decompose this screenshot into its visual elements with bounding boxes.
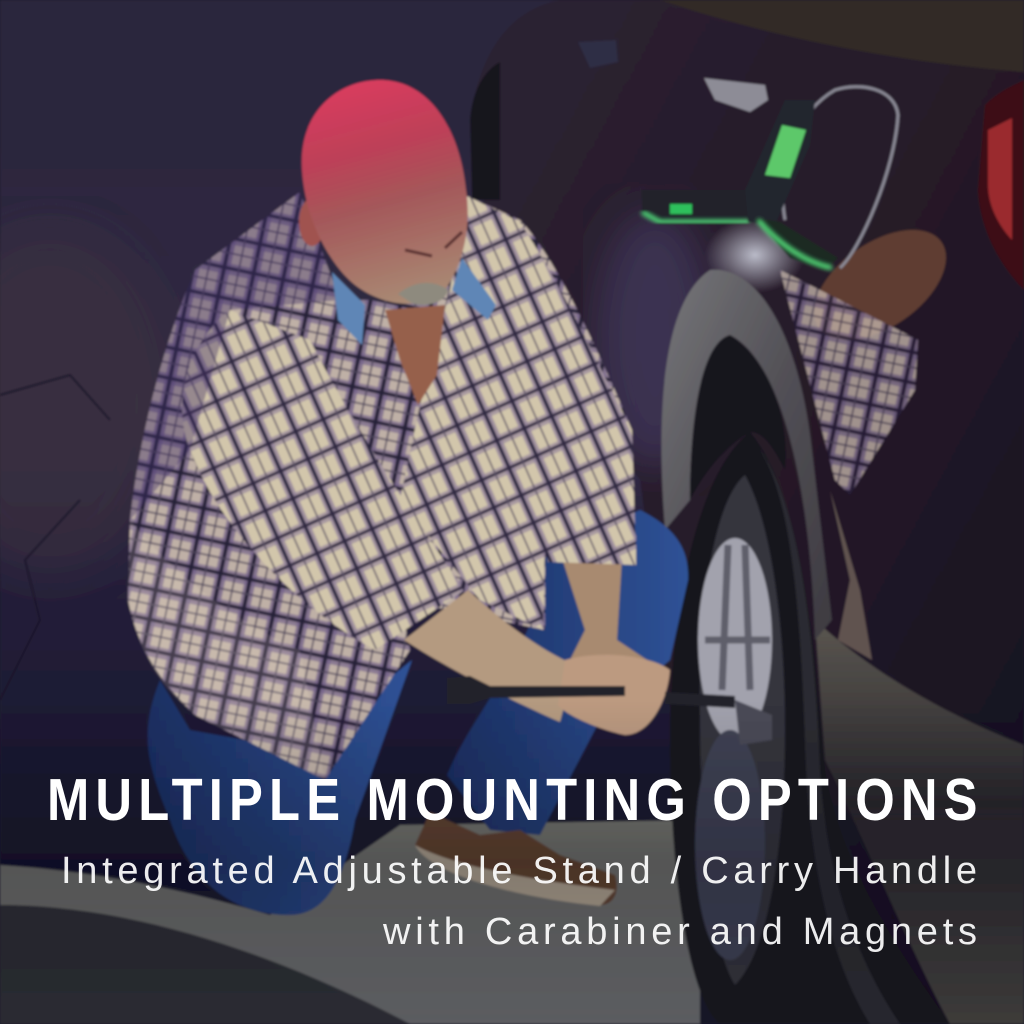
jeans: front leg xyxy=(447,510,688,835)
wheel arch fender xyxy=(661,270,832,640)
shirt sleeve xyxy=(182,310,465,650)
brows and eyes xyxy=(405,232,462,256)
moustache xyxy=(398,283,448,305)
shirt chest panel xyxy=(400,195,636,630)
subtitle line 1: Integrated Adjustable Stand / Carry Handle xyxy=(61,850,977,892)
head and face xyxy=(302,80,468,304)
tire and wheel xyxy=(670,432,950,1024)
purple shoulder light xyxy=(130,192,340,520)
man figure xyxy=(128,80,735,915)
rear door wheel arch xyxy=(470,62,500,200)
dark wheel well xyxy=(690,335,786,500)
dark fade behind caption xyxy=(0,700,1024,1024)
hand xyxy=(558,655,670,735)
right forearm to wrench xyxy=(404,590,575,722)
shirt torso and back xyxy=(128,192,636,780)
work light with green accents xyxy=(642,100,838,270)
reflection of man in car door xyxy=(780,208,966,660)
door handle and mirror mount xyxy=(578,40,898,268)
lower car side panel xyxy=(815,620,1024,1024)
blue collar sides xyxy=(332,272,365,345)
shadow on pavement xyxy=(0,905,410,1024)
left forearm xyxy=(562,558,650,662)
wrench xyxy=(447,676,735,708)
tail light xyxy=(978,80,1024,290)
lit pavement in foreground xyxy=(0,820,700,1024)
shirt shading xyxy=(128,520,325,780)
car body xyxy=(470,0,1024,1024)
title: MULTIPLE MOUNTING OPTIONS xyxy=(47,766,978,833)
work boot xyxy=(415,812,617,905)
ear xyxy=(299,198,325,246)
wheel spokes xyxy=(705,545,770,690)
rolled cuff xyxy=(540,527,636,565)
jeans: back leg xyxy=(148,660,412,915)
chest skin xyxy=(385,305,445,405)
subtitle line 2: with Carabiner and Magnets xyxy=(382,911,977,953)
